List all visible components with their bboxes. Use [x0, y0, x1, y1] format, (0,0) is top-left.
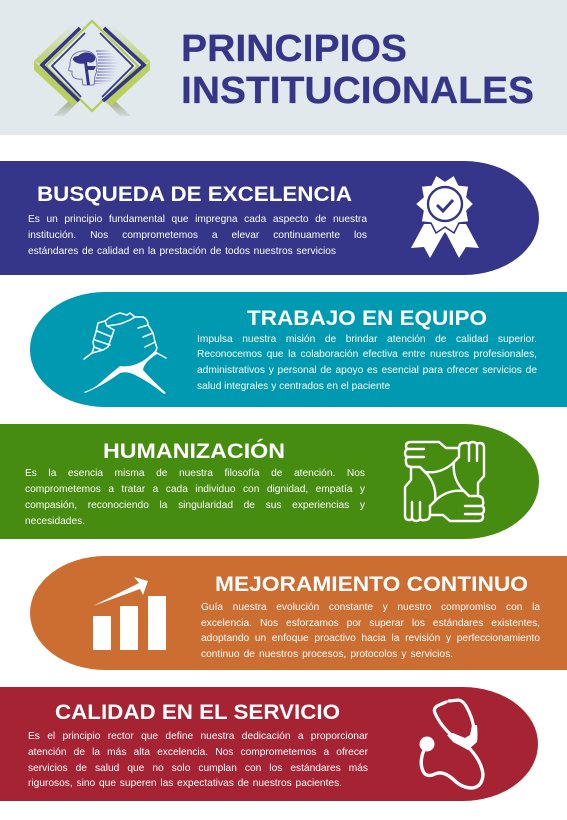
title: [181, 28, 534, 112]
icon: growth bar chart: [93, 577, 166, 650]
text block: humanizacion: compasión, reconociendo la singularidad de sus experiencias y: [25, 500, 365, 510]
text block: busqueda de excelencia: estándares de calidad en la prestación de todos nuestros servicios: [28, 246, 336, 256]
text block: calidad en el servicio: servicios de salud que no solo cumplan con los estándares más: [28, 762, 368, 774]
text block: mejoramiento continuo: [201, 602, 540, 660]
heading: mejoramiento continuo: MEJORAMIENTO CONTINUO: [215, 573, 528, 596]
panel: mejoramiento continuo: [30, 556, 567, 670]
text block: trabajo en equipo: [197, 334, 537, 392]
heading: humanizacion: HUMANIZACIÓN: [103, 439, 285, 463]
icon: handshake: [84, 313, 166, 394]
text block: mejoramiento continuo: excelencia. Nos esforzamos por superar los estándares existentes,: [201, 618, 540, 628]
panel: humanizacion: [0, 424, 539, 539]
panel: trabajo en equipo: [30, 292, 567, 407]
text block: calidad en el servicio: atención de la más alta excelencia. Nos comprometemos a ofrecer: [28, 746, 368, 758]
text block: calidad en el servicio: Es el principio rector que define nuestra dedicación a proporcionar: [28, 730, 368, 742]
icon: award medal: [411, 175, 479, 258]
text block: mejoramiento continuo: Guía nuestra evolución constante y nuestro compromiso con la: [201, 602, 540, 612]
logo thin green diamond: [46, 21, 138, 111]
logo navy chevrons: [42, 28, 144, 101]
text block: mejoramiento continuo: adoptando un enfoque proactivo hacia la revisión y perfeccionamiento: [201, 632, 540, 644]
text block: busqueda de excelencia: Es un principio fundamental que impregna cada aspecto de nuestra: [28, 214, 367, 224]
panel: calidad en el servicio: [0, 687, 538, 801]
panel: busqueda de excelencia: [0, 161, 539, 275]
text block: trabajo en equipo: Reconocemos que la colaboración efectiva entre nuestros profesionales,: [197, 348, 537, 360]
text block: humanizacion: comprometemos a tratar a cada individuo con dignidad, empatía y: [25, 484, 365, 494]
text block: busqueda de excelencia: [28, 214, 368, 256]
title: INSTITUCIONALES: [181, 70, 534, 112]
logo legs: [53, 99, 131, 116]
heading: busqueda de excelencia: BUSQUEDA DE EXCELENCIA: [37, 183, 352, 206]
heading: calidad en el servicio: CALIDAD EN EL SERVICIO: [55, 701, 340, 724]
icon: four linked hands: [405, 442, 484, 521]
header panel: [0, 0, 567, 135]
text block: humanizacion: Es la esencia misma de nuestra filosofía de atención. Nos: [25, 468, 365, 478]
text block: humanizacion: necesidades.: [25, 516, 85, 526]
logo head with tree: [69, 50, 117, 85]
text block: trabajo en equipo: salud integrales y centrados en el paciente: [197, 380, 390, 392]
logo: [34, 21, 150, 116]
text block: trabajo en equipo: administrativos y personal de apoyo es esencial para ofrecer servicios de: [197, 364, 537, 376]
text block: mejoramiento continuo: continuo de nuestros procesos, protocolos y servicios.: [201, 648, 453, 660]
title: PRINCIPIOS: [181, 28, 407, 70]
text block: busqueda de excelencia: institución. Nos comprometemos a elevar continuamente los: [28, 230, 367, 240]
icon: stethoscope: [420, 700, 483, 788]
heading: trabajo en equipo: TRABAJO EN EQUIPO: [247, 307, 487, 330]
logo outer green band: [34, 24, 150, 106]
text block: calidad en el servicio: [28, 730, 368, 788]
text block: humanizacion: [25, 468, 365, 526]
text block: trabajo en equipo: Impulsa nuestra misión de brindar atención de calidad superior.: [197, 334, 537, 344]
text block: calidad en el servicio: rigurosos, sino que superen las expectativas de nuestros pacientes.: [28, 778, 342, 788]
